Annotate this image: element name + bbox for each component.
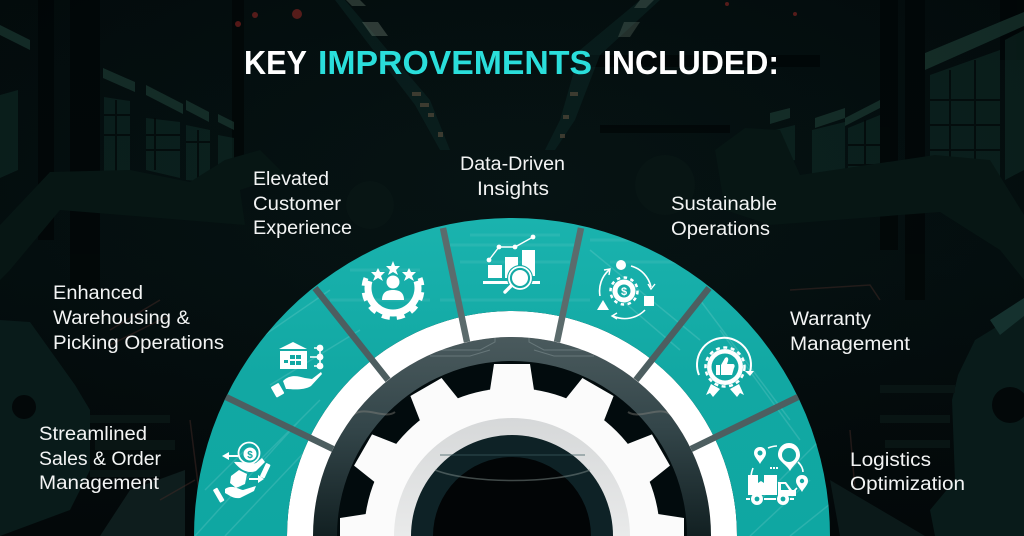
- label: data-driven insights: Data-Driven: [460, 154, 565, 175]
- icon: logistics truck and pins: [746, 443, 808, 505]
- robot bases: [0, 298, 1024, 536]
- label: sustainable operations: [671, 194, 777, 240]
- label: elevated customer experience: [253, 169, 352, 239]
- icon: customer gear with stars: [364, 261, 422, 318]
- label: elevated customer experience: Elevated: [253, 169, 329, 190]
- label: streamlined sales and order management: [39, 424, 162, 494]
- segment dividers: [226, 228, 798, 449]
- title: IMPROVEMENTS: [318, 44, 592, 81]
- label: data-driven insights: Insights: [477, 179, 549, 200]
- ceiling light trails: [335, 0, 660, 150]
- label: enhanced warehousing and picking operations: [53, 283, 224, 354]
- label: warranty management: Warranty: [790, 309, 872, 330]
- label: sustainable operations: Sustainable: [671, 194, 777, 215]
- label: streamlined sales and order management: Management: [39, 473, 160, 494]
- label: enhanced warehousing and picking operations: Enhanced: [53, 283, 143, 304]
- white ring: [287, 311, 737, 536]
- icon: data chart with magnifier: [483, 235, 540, 292]
- label: elevated customer experience: Customer: [253, 194, 342, 215]
- robot arms: [0, 128, 1024, 280]
- label: logistics optimization: Logistics: [850, 450, 931, 471]
- label: data-driven insights: [460, 154, 565, 200]
- label: logistics optimization: [850, 450, 965, 495]
- dark inner ring: [313, 337, 711, 536]
- title: INCLUDED:: [603, 44, 779, 81]
- title: KEY: [244, 44, 307, 81]
- teal segmented arc: [194, 218, 835, 536]
- label: warranty management: [790, 309, 911, 355]
- icon: sales and order hands: [213, 442, 271, 503]
- icon: warranty badge: [697, 338, 754, 397]
- title: [244, 44, 779, 81]
- label: logistics optimization: Optimization: [850, 474, 965, 495]
- label: elevated customer experience: Experience: [253, 218, 352, 239]
- red indicator lights: [235, 2, 797, 27]
- conveyor floor: [90, 385, 955, 536]
- icon: sustainable cycle: $: [621, 286, 627, 298]
- central gear: [340, 364, 684, 536]
- label: sustainable operations: Operations: [671, 219, 770, 240]
- icon: sustainable cycle: [597, 260, 655, 319]
- icon: warehouse and hand: [271, 342, 323, 398]
- label: enhanced warehousing and picking operations: Picking Operations: [53, 333, 224, 354]
- label: streamlined sales and order management: Streamlined: [39, 424, 147, 445]
- label: enhanced warehousing and picking operations: Warehousing &: [53, 308, 190, 329]
- label: warranty management: Management: [790, 334, 911, 355]
- label: streamlined sales and order management: Sales & Order: [39, 449, 162, 470]
- icon: sales and order hands: $: [247, 450, 253, 461]
